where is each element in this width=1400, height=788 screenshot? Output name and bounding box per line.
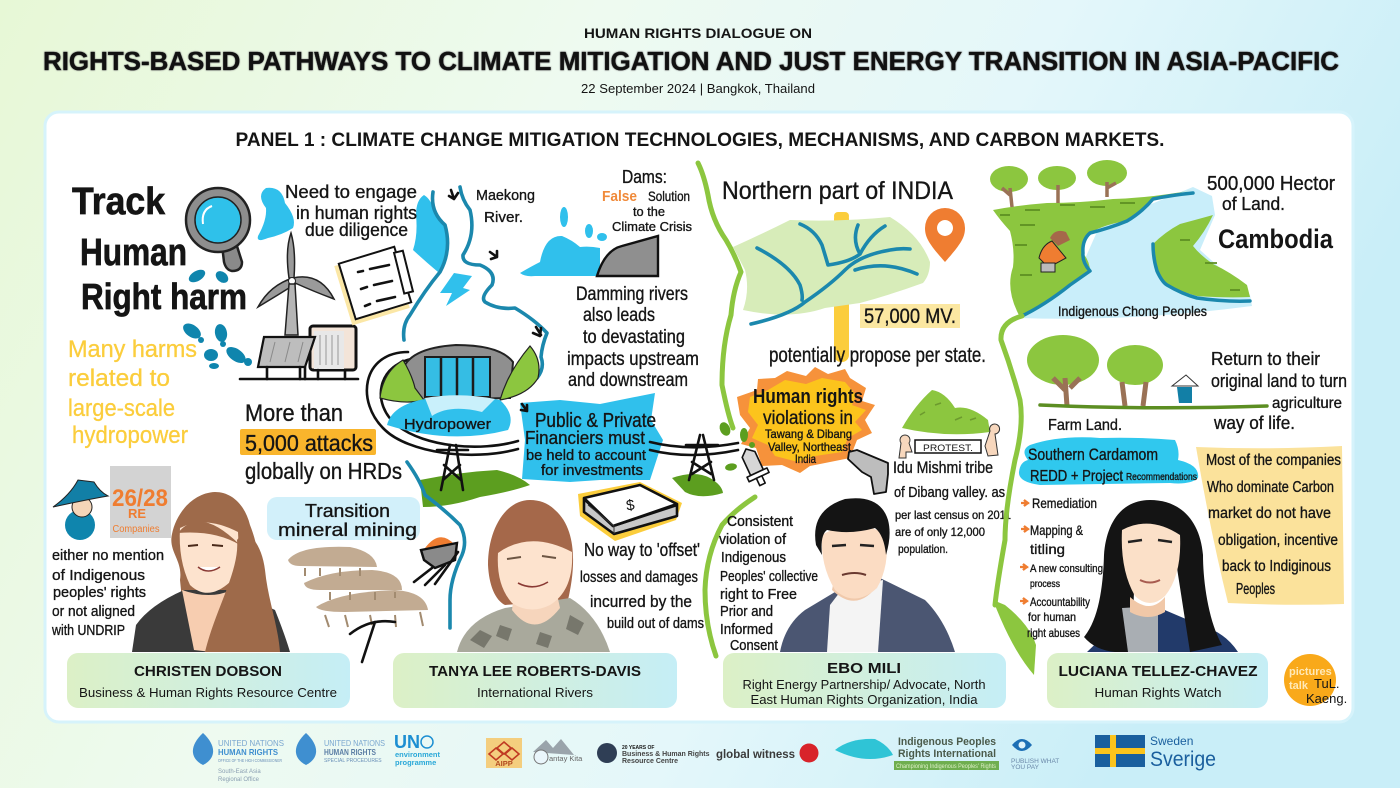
text: 500,000 hectares: of Land. — [1222, 194, 1285, 214]
left land — [993, 190, 1193, 317]
name card: Christen Dobson — [67, 653, 350, 708]
text: consistent violation: right to Free — [720, 587, 797, 603]
section: dams false solution — [520, 167, 699, 391]
text: consistent violation: Peoples' collective — [720, 569, 818, 585]
artist logo: pictures talk: Kaeng. — [1306, 691, 1347, 706]
logo: global witness — [716, 744, 818, 762]
callout burst: human rights violations — [737, 367, 875, 473]
event title block: HUMAN RIGHTS DIALOGUE ON — [584, 25, 812, 41]
cloud: Southern Cardamom REDD+ — [1019, 437, 1198, 485]
map post — [834, 212, 849, 362]
logo: Publish What You Pay: PUBLISH WHAT — [1011, 758, 1059, 765]
icon: dollar banknote stack — [578, 482, 682, 541]
footer logos — [193, 732, 1216, 783]
left hill and pylon — [420, 445, 530, 507]
text: damming rivers: also leads — [583, 305, 655, 326]
callout: public and private financiers: Financiers must — [525, 428, 645, 448]
text: Idu Mishmi tribe: Idu Mishmi tribe — [893, 458, 993, 477]
cloud: Southern Cardamom REDD+: Recommendations — [1126, 472, 1197, 483]
small arrows along the river — [449, 190, 541, 336]
text: 5000 attacks: More than — [245, 400, 343, 427]
logo: global witness: global witness — [716, 749, 795, 761]
box: transition mineral mining: mineral mining — [278, 520, 417, 540]
logo: Business and Human Rights Resource Centre: Business & Human Rights — [622, 751, 710, 758]
list: recommendations: Accountability — [1030, 595, 1090, 609]
text: Mekong River: Maekong — [476, 187, 535, 204]
text: no way to offset: incurred by the — [590, 592, 692, 611]
text: Idu Mishmi tribe — [893, 458, 1011, 556]
callout burst: human rights violations: Tawang & Dibang — [765, 427, 852, 441]
section: dams false solution: False — [602, 188, 637, 205]
text: many harms: large-scale — [68, 395, 175, 422]
list: recommendations: titling — [1030, 541, 1065, 557]
highlight: 5000 attacks — [240, 429, 376, 455]
artist logo: pictures talk: pictures — [1289, 666, 1332, 678]
leaves near sword — [718, 421, 755, 471]
logo: Publish What You Pay: YOU PAY — [1011, 764, 1040, 771]
callout: public and private financiers: for investments — [541, 462, 643, 479]
logo: AIPP: AIPP — [495, 759, 513, 768]
section: dams false solution: Solution — [648, 188, 690, 204]
artist logo: pictures talk: TuL. — [1314, 676, 1340, 691]
artist logo: pictures talk — [1284, 654, 1347, 706]
stat box: 26/28 RE companies: 26/28 — [112, 485, 168, 512]
text: farm land: Farm Land. — [1048, 417, 1122, 434]
logo: Indigenous Peoples Rights International: Indigenous Peoples — [898, 736, 996, 748]
heading: track human right harm — [72, 181, 247, 317]
logo: Sweden Sverige flag: Sverige — [1150, 748, 1216, 771]
portrait: Ebo Mili — [780, 498, 955, 652]
note: companies carbon market: Most of the companies — [1206, 452, 1341, 469]
name card: Luciana Tellez-Chavez — [1047, 653, 1268, 708]
name card: Luciana Tellez-Chavez: Human Rights Watch — [1094, 685, 1222, 700]
portrait: Luciana Tellez-Chavez — [1084, 500, 1238, 652]
icon: lightning bolt — [440, 273, 472, 306]
map shape — [733, 217, 930, 315]
text: damming rivers: to devastating — [583, 327, 685, 348]
right land — [1153, 215, 1250, 297]
power line loop — [367, 352, 518, 455]
illustration: protest mountain — [899, 390, 1000, 458]
text: no way to offset: build out of dams — [607, 615, 704, 632]
icon: dollar banknote stack: $ — [625, 496, 636, 515]
name card: Christen Dobson: Business & Human Rights Resource Centre — [79, 685, 337, 700]
callout burst: human rights violations: Valley, Northeast — [768, 440, 852, 454]
text: consistent violation: violation of — [719, 532, 787, 548]
text: consistent violation: Consent — [730, 638, 778, 654]
text: consistent violation: Consistent — [727, 514, 793, 530]
logo: UN Human Rights South-East Asia: OFFICE OF THE HIGH COMMISSIONER — [218, 758, 283, 763]
artist logo: pictures talk: talk — [1289, 680, 1309, 692]
heading: Cambodia: Cambodia — [1218, 224, 1334, 254]
portrait: Tanya Lee Roberts-Davis — [457, 500, 610, 652]
name card: Ebo Mili: East Human Rights Organization, India — [750, 692, 978, 707]
land grass marks — [1000, 203, 1240, 290]
text: due diligence: Need to engage — [285, 182, 417, 202]
text: due diligence: due diligence — [305, 220, 408, 240]
text: damming rivers — [567, 284, 699, 391]
event title block: RIGHTS-BASED PATHWAYS TO CLIMATE MITIGATION AND JUST ENERGY TRANSITION IN ASIA-PACIFIC — [43, 46, 1339, 76]
event title block: 22 September 2024 | Bangkok, Thailand — [581, 81, 815, 96]
icon: pickaxe — [350, 621, 395, 662]
power lines and right pylon — [650, 435, 738, 496]
heading: Northern part of INDIA: Northern part of INDIA — [722, 177, 953, 205]
Mekong river line — [404, 192, 448, 340]
illustration: hydropower dam — [367, 345, 539, 455]
post overlay — [834, 212, 849, 220]
event title block: RIGHTS-BASED PATHWAYS TO CLIMATE MITIGATION AND JUST ENERGY TRANSITION IN ASIA-PACIFIC — [43, 46, 1339, 76]
stat box: 26/28 RE companies: Companies — [112, 524, 160, 535]
logo: UN Human Rights Special Procedures: HUMAN RIGHTS — [324, 747, 376, 757]
icon: magnifying glass — [186, 188, 250, 271]
name card: Ebo Mili: EBO MILI — [827, 661, 901, 677]
farmer with hat — [1172, 375, 1198, 403]
text: return to their land: agriculture — [1272, 395, 1342, 412]
icon: wind turbine — [258, 233, 334, 335]
panel heading: PANEL 1 : CLIMATE CHANGE MITIGATION TECHNOLOGIES, MECHANISMS, AND CARBON MARKETS. — [236, 130, 1164, 151]
note: companies carbon market: obligation, incentive — [1218, 532, 1338, 549]
text: damming rivers: Damming rivers — [576, 284, 688, 305]
logo: UN Environment Programme — [394, 732, 441, 767]
logo: Business and Human Rights Resource Centre: Resource Centre — [622, 758, 678, 765]
farmer figure — [1050, 231, 1070, 246]
river water — [1020, 187, 1252, 319]
ground line — [1040, 405, 1267, 408]
list: recommendations: for human — [1028, 610, 1076, 624]
text: many harms: hydropower — [72, 422, 188, 449]
text: no way to offset — [580, 540, 704, 632]
icon: checklist clipboard — [334, 247, 413, 325]
note: companies carbon market: Who dominate Carbon — [1207, 479, 1334, 496]
cloud: Southern Cardamom REDD+: REDD + Project — [1030, 468, 1123, 485]
text: consistent violation — [719, 514, 818, 654]
callout: public and private financiers — [520, 393, 663, 482]
trees on the land — [990, 160, 1127, 192]
text: consistent violation: Indigenous — [721, 550, 786, 566]
logo: UN Environment Programme: programme — [395, 758, 436, 767]
callout burst: human rights violations: India — [795, 452, 816, 466]
Cambodia border green line — [993, 316, 1036, 675]
list: recommendations: Remediation — [1032, 495, 1097, 511]
highlight: 57,000 MV — [860, 304, 960, 328]
note: companies carbon market: market do not have — [1208, 505, 1331, 522]
list: recommendations: process — [1030, 579, 1060, 590]
logo: Business and Human Rights Resource Centre — [597, 743, 710, 765]
callout burst: human rights violations: Human rights — [753, 386, 863, 408]
note: companies carbon market: Peoples — [1236, 581, 1275, 598]
logo: Indigenous Peoples Rights International: Championing Indigenous Peoples' Rights — [896, 764, 996, 770]
text: many harms — [68, 336, 197, 449]
text: Dams false solution: Dams: — [622, 167, 667, 187]
name card: Ebo Mili: Right Energy Partnership/ Advocate, North — [742, 677, 986, 692]
event title block — [43, 25, 1339, 96]
logo: UN Human Rights South-East Asia: South-East Asia — [218, 769, 261, 775]
illustration: mining terraces — [288, 547, 428, 627]
text: Indigenous Chong Peoples: Indigenous Chong Peoples — [1058, 303, 1207, 319]
text: 500,000 hectares — [1207, 173, 1335, 214]
text: Idu Mishmi tribe: population. — [898, 542, 948, 556]
icon: person with conical hat — [53, 480, 108, 540]
name card: Christen Dobson: CHRISTEN DOBSON — [134, 664, 282, 680]
logo: UN Human Rights South-East Asia — [193, 733, 284, 783]
illustration: Cambodia land and river — [990, 160, 1252, 319]
callout burst: human rights violations: violations in — [763, 408, 853, 429]
logo: UN Human Rights South-East Asia: UNITED NATIONS — [218, 738, 284, 748]
illustration: farm land — [1027, 335, 1267, 408]
stat box: 26/28 RE companies — [110, 466, 171, 538]
logo: Bantay Kita: antay Kita — [549, 754, 583, 763]
text: no way to offset: No way to 'offset' — [584, 540, 700, 560]
name card: Tanya Lee Roberts-Davis — [393, 653, 677, 708]
icon: water splash — [520, 207, 607, 276]
protest banner — [915, 440, 981, 453]
callout: public and private financiers: be held to account — [526, 447, 647, 464]
text: no way to offset: losses and damages — [580, 569, 698, 586]
text: UNDRIP statement: peoples' rights — [53, 584, 146, 601]
map rivers — [751, 224, 917, 324]
text: 5000 attacks: 5,000 attacks — [245, 430, 373, 456]
icon: solar panel and battery — [240, 326, 358, 379]
tree trunks — [1053, 378, 1146, 406]
name card: Tanya Lee Roberts-Davis: International Rivers — [477, 685, 594, 700]
list: recommendations: right abuses — [1027, 626, 1080, 640]
list: recommendations: A new consulting — [1030, 563, 1103, 575]
text: consistent violation: Prior and — [720, 604, 773, 620]
main white panel — [45, 112, 1353, 722]
section: dams false solution: to the — [633, 204, 665, 219]
text: return to their land — [1211, 349, 1347, 433]
logo: UN Environment Programme: UN — [394, 732, 420, 752]
icon: sword — [736, 444, 772, 489]
reservoir water — [387, 397, 511, 436]
name card: Luciana Tellez-Chavez: LUCIANA TELLEZ-CHAVEZ — [1058, 664, 1258, 680]
tree trunks — [1002, 182, 1116, 207]
logo: UN Human Rights Special Procedures — [296, 733, 385, 765]
logo: UN Human Rights South-East Asia: Regional Office — [218, 777, 260, 783]
logo: Sweden Sverige flag: Sweden — [1150, 734, 1193, 748]
text: potentially propose per state: potentially propose per state. — [769, 344, 986, 367]
text: consistent violation: Informed — [720, 622, 773, 638]
text: UNDRIP statement: with UNDRIP — [51, 622, 125, 639]
text: many harms: Many harms — [68, 336, 197, 363]
icon: dam wall wedge — [597, 236, 658, 276]
text: 500,000 hectares: 500,000 Hector — [1207, 173, 1335, 195]
note: companies carbon market — [1196, 446, 1344, 605]
text: due diligence: in human rights — [296, 203, 417, 223]
logo: Indigenous Peoples Rights International — [835, 736, 999, 770]
logo: UN Human Rights Special Procedures: SPECIAL PROCEDURES — [324, 758, 382, 764]
section: northern India map — [722, 177, 986, 367]
text: 5000 attacks — [240, 400, 402, 484]
text: UNDRIP statement: or not aligned — [52, 603, 135, 620]
heading: track human right harm: Track — [72, 181, 166, 223]
callout: public and private financiers: Public & Private — [535, 410, 656, 432]
text: Idu Mishmi tribe: of Dibang valley. as — [894, 484, 1005, 501]
text: UNDRIP statement: either no mention — [52, 547, 164, 564]
text: UNDRIP statement — [51, 547, 164, 639]
portrait: Christen Dobson — [132, 492, 290, 652]
blue water blobs — [258, 188, 448, 272]
heading: track human right harm: Right harm — [81, 276, 247, 317]
logo: AIPP — [486, 738, 522, 768]
text: return to their land: Return to their — [1211, 349, 1320, 369]
label: Hydropower: Hydropower — [404, 416, 491, 433]
text: damming rivers: impacts upstream — [567, 349, 699, 370]
text: Idu Mishmi tribe: are of only 12,000 — [895, 525, 985, 539]
trees — [1027, 335, 1163, 385]
heading: track human right harm: Human — [80, 232, 187, 274]
logo: UN Human Rights Special Procedures: UNITED NATIONS — [324, 738, 385, 748]
text: many harms: related to — [68, 365, 170, 392]
icon: footprints — [180, 267, 252, 369]
list: recommendations — [1020, 495, 1103, 640]
protesters — [899, 424, 1000, 458]
text: Mekong River: River. — [484, 209, 523, 226]
logo: Sweden Sverige flag — [1095, 734, 1216, 771]
icon: mining cart — [414, 537, 458, 585]
text: return to their land: way of life. — [1213, 413, 1295, 433]
logo: UN Environment Programme: environment — [395, 750, 441, 759]
text: UNDRIP statement: of Indigenous — [52, 567, 145, 584]
stat box: 26/28 RE companies: RE — [128, 506, 146, 521]
lower river line — [407, 462, 465, 628]
bullet arrows — [1020, 500, 1028, 604]
logo: Business and Human Rights Resource Centre: 20 YEARS OF — [622, 745, 654, 751]
list: recommendations: Mapping & — [1030, 522, 1084, 538]
logo: Indigenous Peoples Rights International: Rights International — [898, 748, 996, 760]
text: 5000 attacks: globally on HRDs — [245, 458, 402, 484]
text: Mekong River — [476, 187, 535, 226]
section: dams false solution: Climate Crisis — [612, 219, 692, 234]
note: companies carbon market: back to Indiginous — [1222, 558, 1331, 575]
icon: location pin — [925, 208, 965, 262]
India border green line — [698, 163, 741, 428]
section: track human rights harm — [68, 181, 252, 449]
section: Cambodia land — [990, 160, 1335, 319]
icon: handgun — [848, 450, 888, 494]
logo: Publish What You Pay — [1011, 739, 1059, 771]
name card: Ebo Mili — [723, 653, 1006, 708]
hills — [380, 360, 424, 402]
text: Idu Mishmi tribe: per last census on 2011 — [895, 508, 1011, 522]
logo: Bantay Kita — [533, 739, 583, 764]
illustration: protest mountain: PROTEST. — [923, 443, 973, 454]
text: due diligence — [285, 182, 417, 240]
box: transition mineral mining: Transition — [305, 501, 390, 521]
text: damming rivers: and downstream — [568, 370, 688, 391]
box: transition mineral mining — [267, 497, 420, 540]
text: return to their land: original land to turn — [1211, 371, 1347, 391]
river banks — [1020, 193, 1250, 317]
cloud: Southern Cardamom REDD+: Southern Cardamom — [1028, 445, 1158, 464]
logo: UN Human Rights South-East Asia: HUMAN RIGHTS — [218, 747, 278, 757]
dam wall — [402, 345, 513, 400]
name card: Tanya Lee Roberts-Davis: TANYA LEE ROBERTS-DAVIS — [429, 664, 641, 680]
section: northern India map: 57,000 MV. — [864, 305, 956, 328]
